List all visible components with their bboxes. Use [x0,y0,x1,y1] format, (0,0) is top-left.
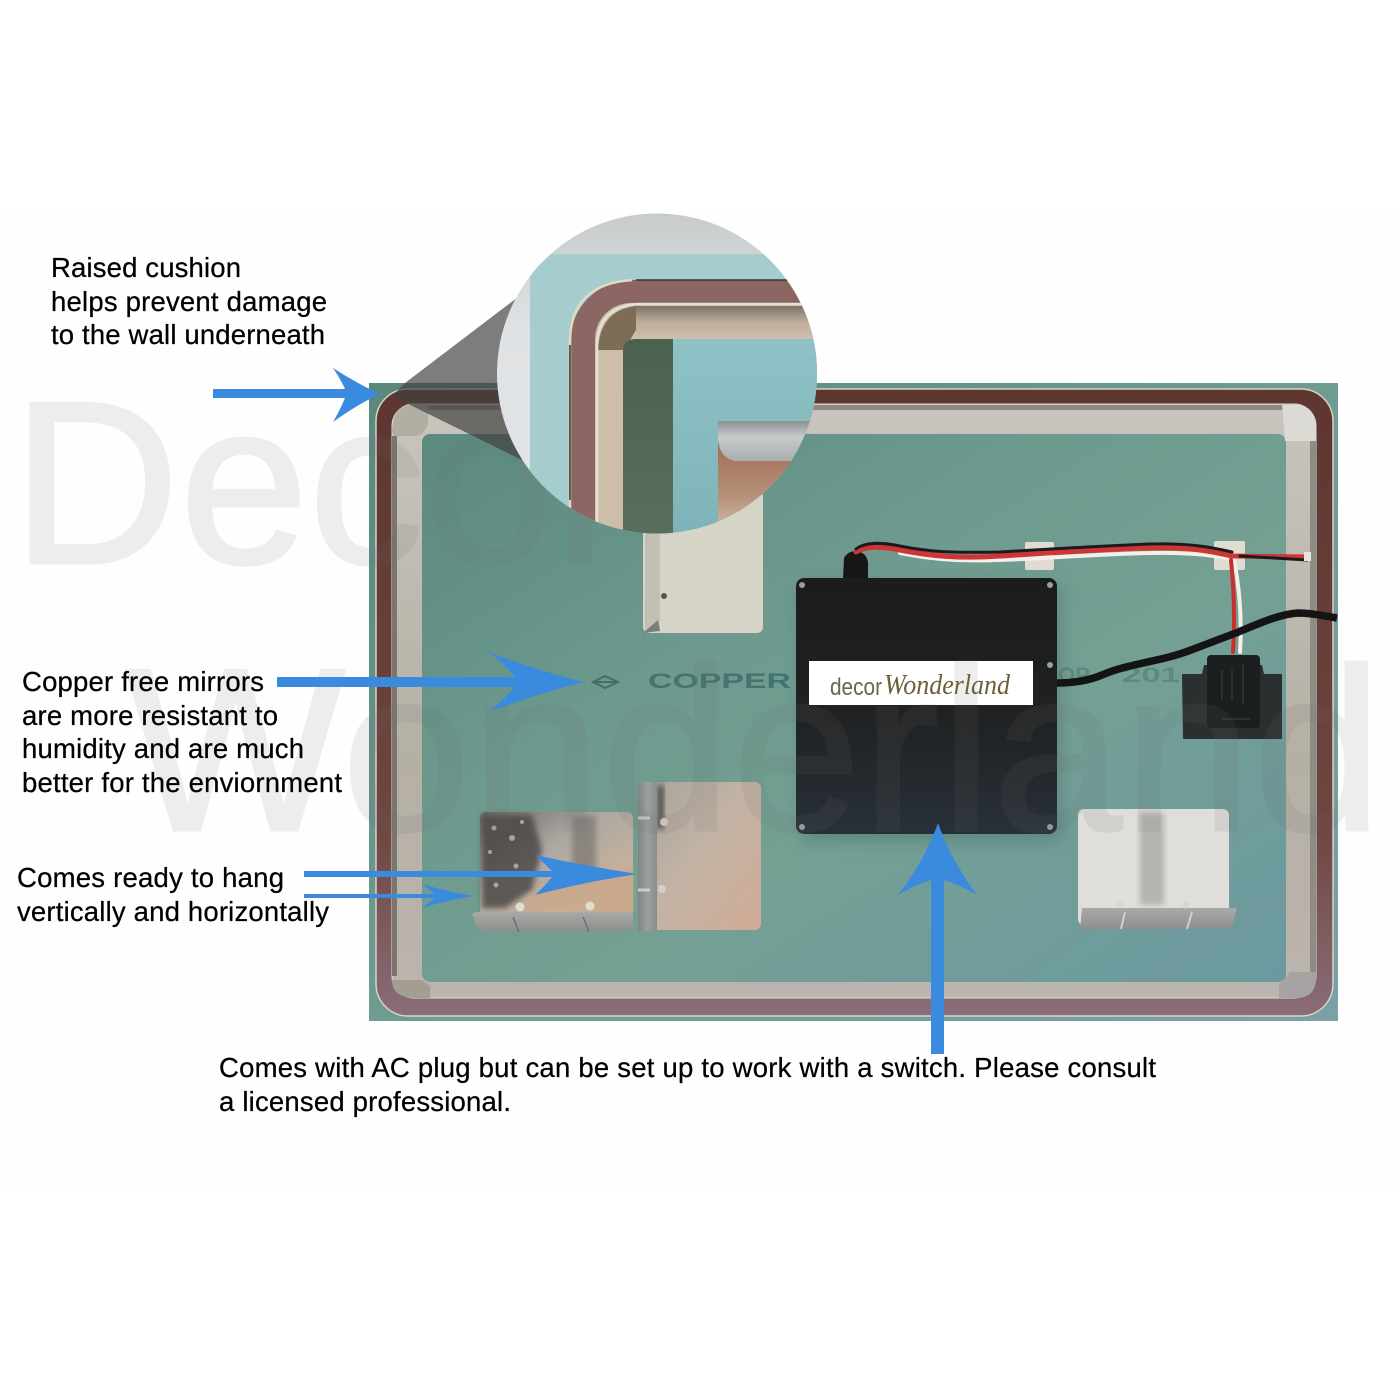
plate [1078,809,1229,925]
text: ready to hang: Comes ready to hang [17,862,284,893]
module [1207,655,1260,728]
bracket tabs [638,818,650,890]
white wire [900,553,1241,652]
mirror clip: right [1078,809,1237,930]
module print [1222,664,1250,719]
inner upper teal [623,339,817,534]
box shadow [800,584,1062,842]
clip lower plate [718,440,791,522]
screws [799,582,805,588]
stamped text: COPPER: COPPER [648,669,792,693]
arrow: to cushion [213,368,380,422]
plate [650,782,761,930]
bottom bracket [472,912,633,932]
silver plate [643,490,763,633]
cushion close-up [570,280,817,534]
faint background band [0,213,1400,1190]
vertical bracket [638,782,657,931]
red wire down [1231,560,1234,652]
aluminium frame [392,404,1316,998]
brand text: decor: decor [830,674,882,701]
screws [1116,902,1124,908]
panel: mirror back photo [369,383,1338,1021]
arrow: vertical hang bracket [304,855,638,895]
wires [856,543,1311,652]
cushion dark seam [569,279,788,500]
power plug nub [843,551,868,580]
label background [809,661,1033,705]
teal backing [369,383,1338,1021]
screws [516,902,524,912]
cable clip left [1025,542,1054,570]
arrow: to copper stamp [277,652,584,712]
frame left inner shade [392,436,397,976]
cable clip right [1214,541,1245,570]
dimmer module [1182,655,1282,739]
frame right inner shade [1310,440,1316,975]
LED driver box [796,578,1057,834]
arrow: to driver box [898,823,977,1054]
box body [796,578,1057,834]
hook lines [1121,912,1192,929]
frame top shade [428,405,1288,410]
base plate [1182,665,1282,739]
text: raised cushion: to the wall underneath [51,319,325,350]
inner mirror back [422,434,1286,982]
text: copper free mirrors: Copper free mirrors [22,666,264,697]
mirror clip: lower left [472,812,633,932]
mirror clip: top [643,490,763,633]
text: ready to hang [17,862,329,927]
stamped text: 201: 201 [1122,663,1180,687]
light teal backing [530,254,817,521]
watermark: Wonderland: Wonderland [126,621,1382,880]
brand label [809,661,1033,705]
hook lines [513,917,589,932]
frame corner top right [1282,405,1316,441]
text: AC plug note [219,1052,1156,1117]
marbled mid band [572,816,596,878]
text: copper free mirrors: better for the enviornment [22,767,342,798]
magnifier connector wedge [392,297,522,460]
frame corner [598,306,636,350]
frame corner bottom right [1279,972,1316,998]
brand text: Wonderland: Wonderland [884,669,1010,701]
wire end [1304,552,1311,561]
arrow: horizontal hang bracket [304,884,474,908]
raised cushion strip [376,389,1333,1016]
vertical bracket [645,490,660,631]
bottom bracket [1080,908,1237,930]
marbled dark area [482,815,542,908]
inner dark band [623,339,673,540]
frame corner bottom left [392,980,430,998]
black wire [856,543,1307,560]
stamped mark: diamond [593,676,618,688]
magnifier: corner close-up [497,214,817,534]
bracket foot [643,620,660,633]
cushion outline [570,280,632,540]
watermark: Decor: Decor [12,354,631,613]
frame corner top left [392,404,428,436]
text: AC plug note: Comes with AC plug but can be set up to work with a switch. Please consult [219,1052,1156,1083]
black power cord [1057,613,1337,683]
frame top face [636,306,813,338]
red wire [856,547,1307,557]
text: AC plug note: a licensed professional. [219,1086,511,1117]
grey vertical stripe [1140,813,1164,905]
wall background [490,210,830,540]
text: ready to hang: vertically and horizontally [17,896,329,927]
text: copper free mirrors: humidity and are much [22,733,304,764]
stamped text: OP: OP [1058,663,1090,687]
dark edge spot [657,785,664,829]
screw [661,593,667,599]
peach lower area [520,870,633,910]
text: copper free mirrors: are more resistant to [22,700,278,731]
plate [480,812,633,917]
text: raised cushion [51,252,327,350]
frame white edge [596,302,802,522]
mirror clip: centre [638,782,761,931]
text: raised cushion: helps prevent damage [51,286,327,317]
marble specks [488,820,524,888]
screws [660,818,668,826]
text: copper free mirrors [22,666,342,798]
clip silver top [718,421,810,461]
text: raised cushion: Raised cushion [51,252,241,283]
frame close-up [595,303,817,533]
